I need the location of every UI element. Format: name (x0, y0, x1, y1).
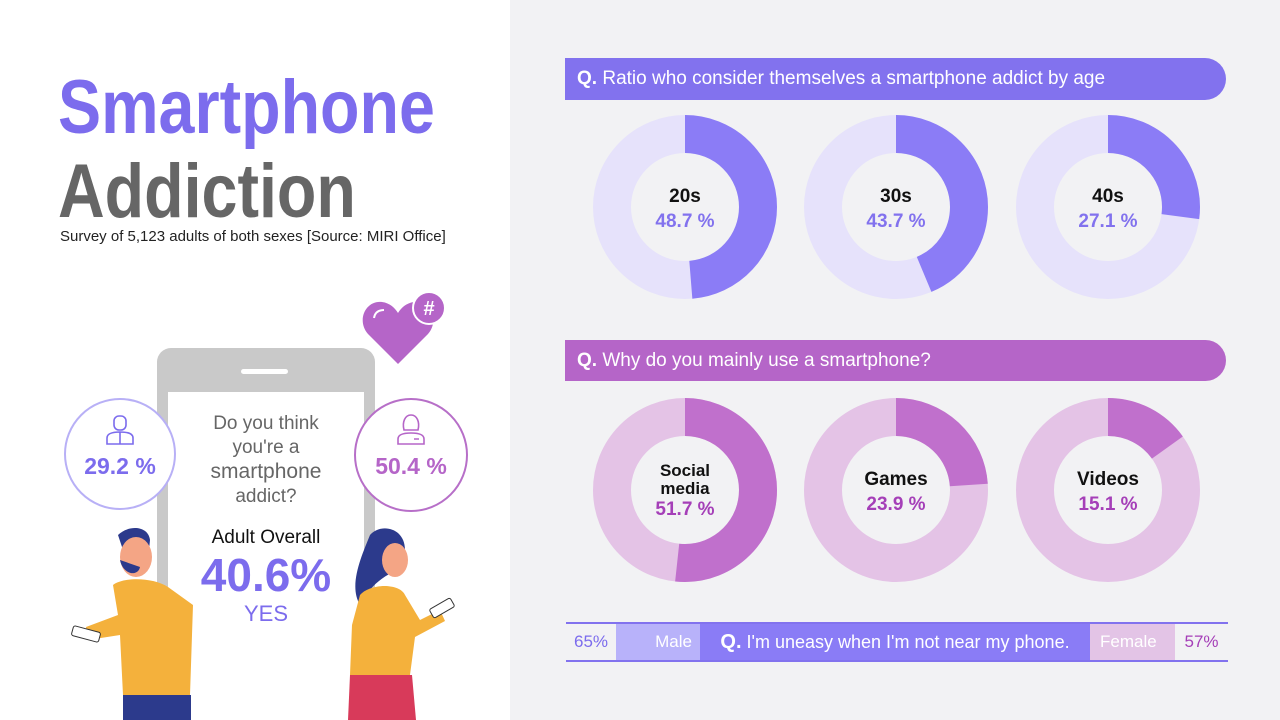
title: Smartphone (58, 65, 435, 150)
icon: heart with hashtag: # (423, 298, 435, 320)
header: usage question (565, 340, 1226, 381)
donut charts: usage: Videos (1077, 469, 1139, 490)
icon: heart with hashtag (362, 293, 444, 364)
donut charts: usage: 51.7 % (655, 499, 715, 520)
donut charts: age: 20s (669, 186, 701, 207)
bottom comparison bar: Q. I'm uneasy when I'm not near my phone. (720, 631, 1070, 653)
phone text: question (211, 413, 321, 507)
phone text: question: smartphone (211, 460, 321, 483)
phone illustration (157, 348, 375, 720)
donut charts: usage: Games (864, 469, 928, 490)
adult overall stat: YES (244, 601, 288, 626)
donut charts: usage: Social (660, 461, 710, 480)
man illustration (71, 528, 193, 720)
donut charts: usage: 23.9 % (866, 494, 926, 515)
title: Addiction (58, 149, 356, 234)
bottom comparison bar (566, 622, 1228, 662)
donut charts: age: 40s (1092, 186, 1124, 207)
male circle (64, 398, 176, 510)
bottom comparison bar: 57% (1184, 632, 1219, 651)
header: age question (565, 58, 1226, 100)
male circle: 29.2 % (84, 453, 156, 479)
phone text: question: Do you think (213, 413, 319, 434)
donut charts: age (593, 115, 1200, 299)
left panel (0, 0, 510, 720)
header: age question: Q. Ratio who consider themselves a smartphone addict by age (577, 68, 1105, 89)
title (58, 65, 435, 234)
donut charts: age: 48.7 % (655, 211, 715, 232)
female circle (354, 398, 468, 512)
phone text: question: addict? (235, 486, 297, 507)
bottom comparison bar: Female (1100, 632, 1157, 651)
adult overall stat (201, 527, 331, 626)
donut charts: age: 30s (880, 186, 912, 207)
donut charts: usage (593, 398, 1200, 582)
phone text: question: you're a (232, 437, 300, 458)
female circle: 50.4 % (375, 453, 447, 479)
donut charts: age: 27.1 % (1078, 211, 1138, 232)
adult overall stat: Adult Overall (212, 527, 320, 548)
header: usage question: Q. Why do you mainly use a smartphone? (577, 350, 931, 371)
donut charts: age: 43.7 % (866, 211, 926, 232)
bottom comparison bar: 65% (574, 632, 608, 651)
adult overall stat: 40.6% (201, 549, 331, 601)
subtitle: Survey of 5,123 adults of both sexes [Source: MIRI Office] (60, 228, 446, 245)
woman illustration (348, 528, 455, 720)
donut charts: usage: media (660, 479, 710, 498)
donut charts: usage: 15.1 % (1078, 494, 1138, 515)
bottom comparison bar: Male (655, 632, 692, 651)
